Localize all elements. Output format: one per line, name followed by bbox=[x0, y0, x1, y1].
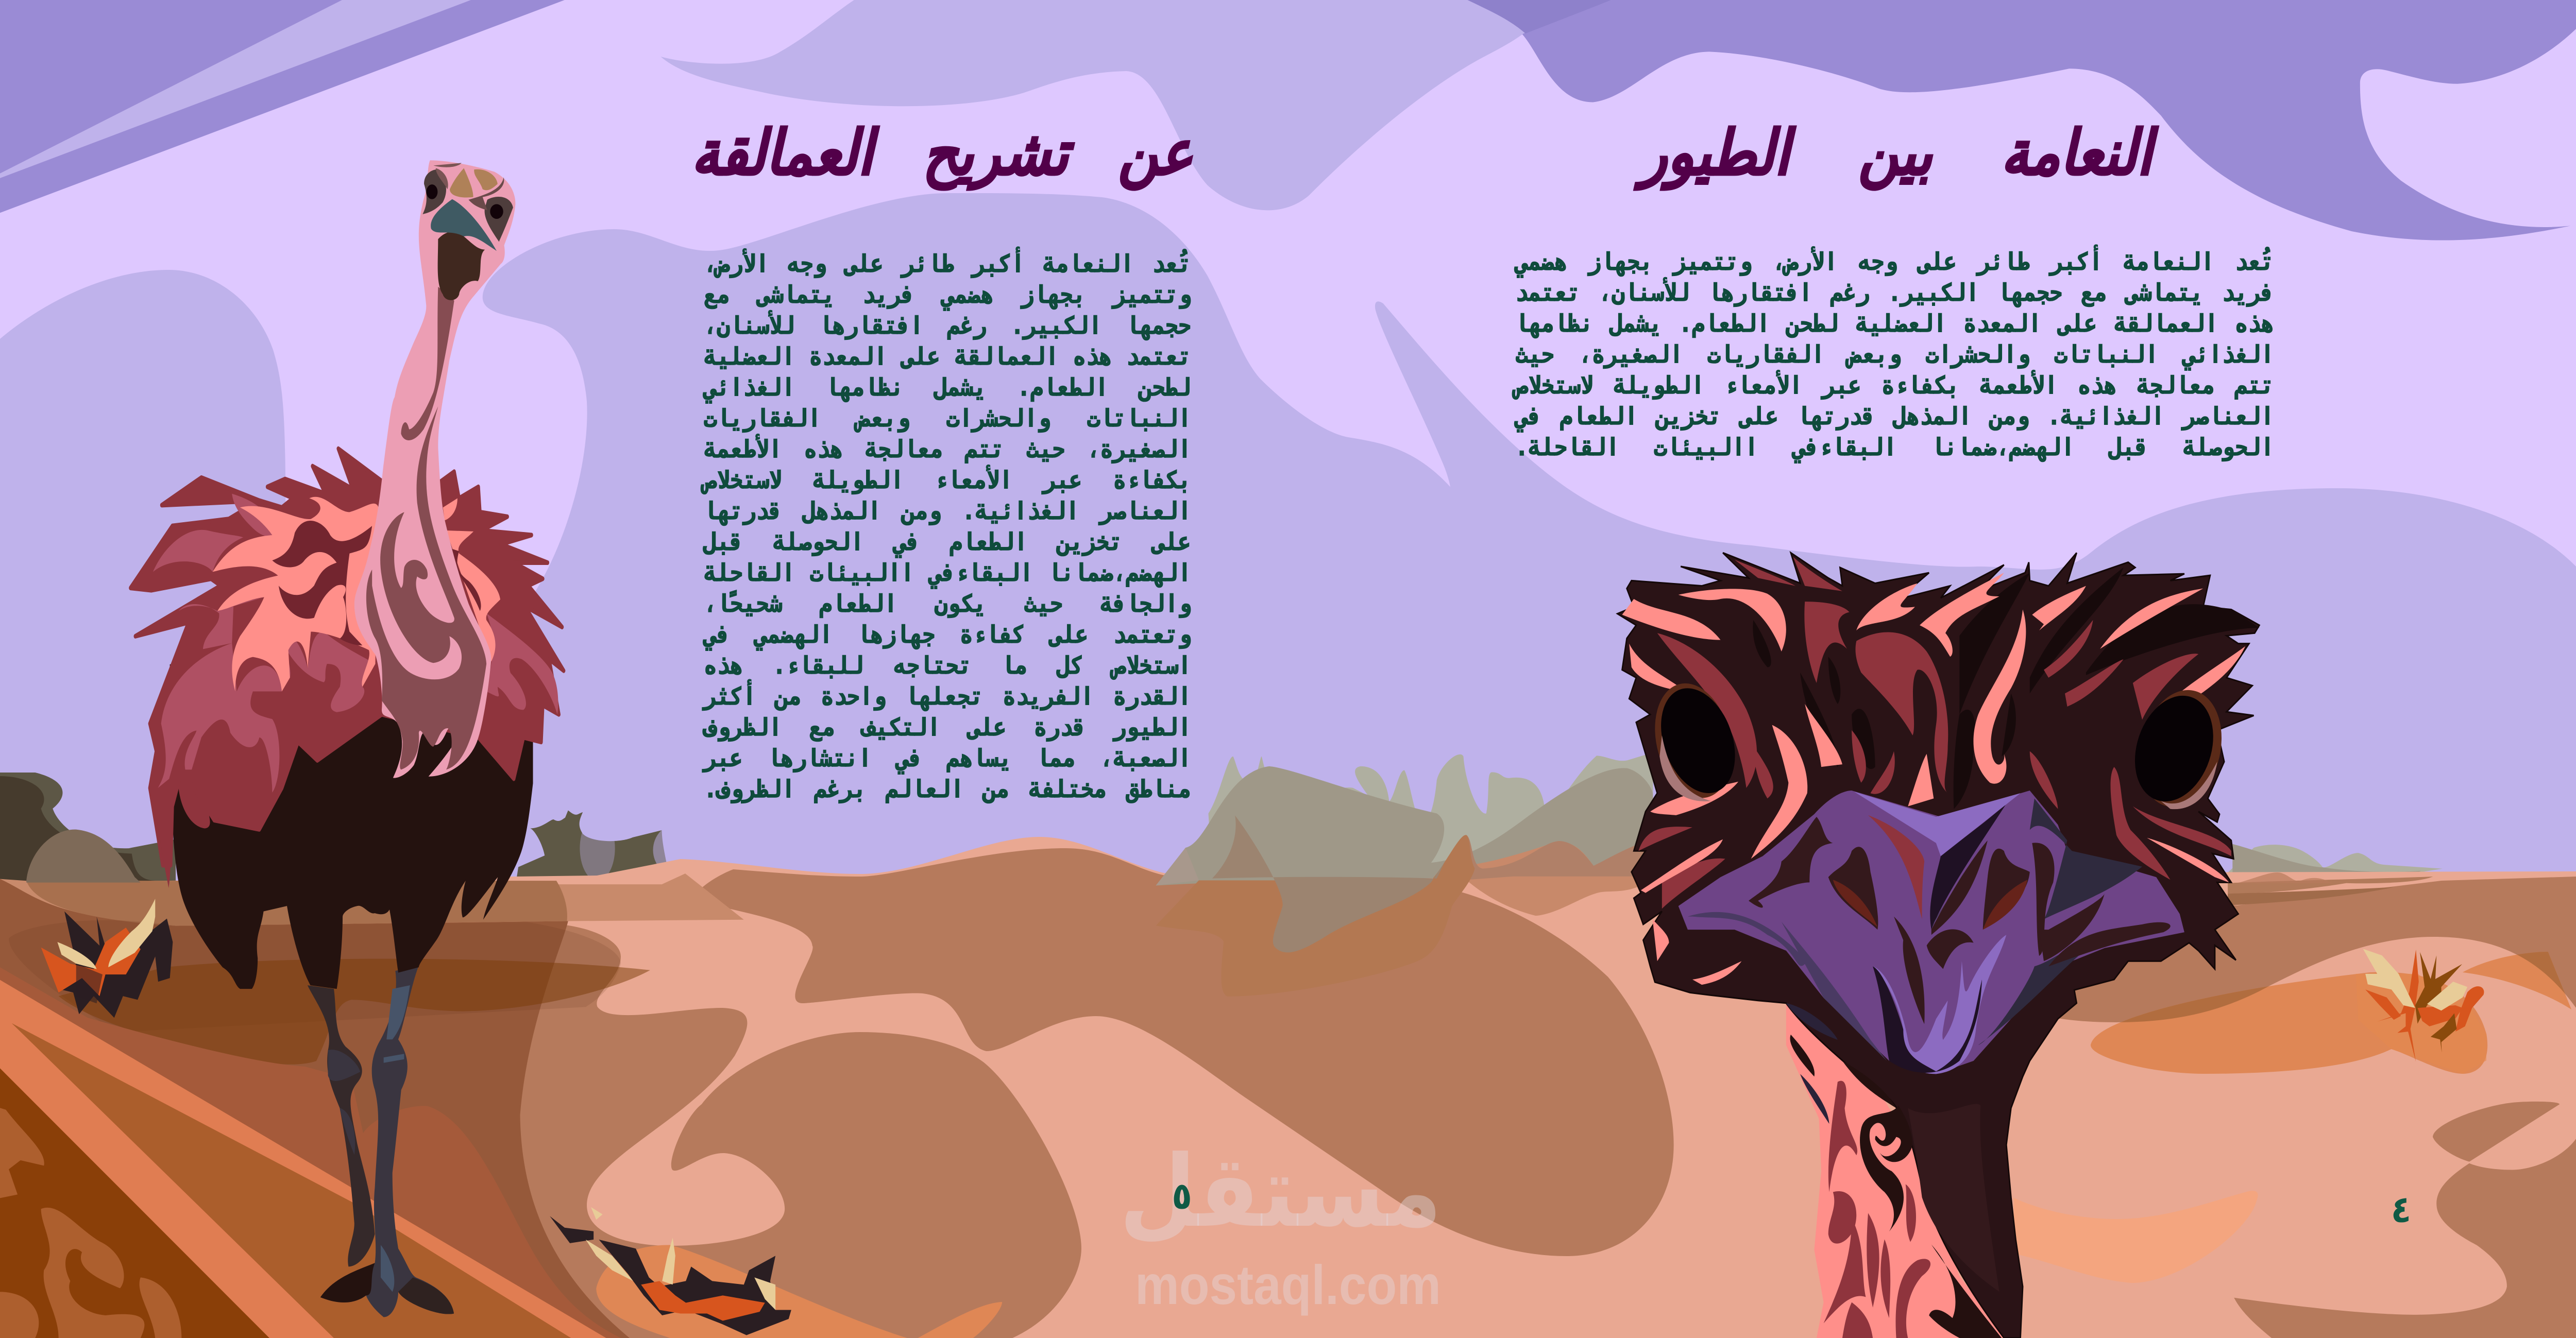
watermark: mostaql logo: مستقل bbox=[1120, 1135, 1442, 1249]
dune: right dune bbox=[1974, 877, 2576, 1022]
ostrich neck bbox=[354, 160, 515, 778]
sky: lower lavender layer bbox=[0, 193, 2576, 927]
emu right eye bbox=[2120, 678, 2234, 819]
peach and lower right dunes bbox=[2013, 1102, 2576, 1338]
ostrich head bbox=[422, 163, 513, 300]
emu neck pink bbox=[1786, 1003, 2006, 1338]
text block: left page: بكفاءة عبر الأمعاء الطويلة لاستخلاص bbox=[704, 466, 1191, 494]
left shrubs on horizon bbox=[0, 773, 706, 895]
text block: right page: تُعد النعامة أكبر طائر على وجه الأرض، وتتميز بجهاز هضمي bbox=[1515, 248, 2274, 276]
dune: right horizon shading bbox=[2228, 872, 2433, 905]
dune: orange patches bbox=[2091, 952, 2571, 1074]
text block: left page: على تخزين الطعام في الحوصلة قبل bbox=[704, 528, 1191, 556]
distant mountains: centre bbox=[1208, 752, 1653, 877]
text block: left page: النباتات والحشرات وبعض الفقاريات bbox=[704, 404, 1191, 433]
text block: right page: هذه العمالقة على المعدة العضلية لطحن الطعام. يشمل نظامها bbox=[1515, 310, 2274, 338]
emu feathers black streaks bbox=[1753, 568, 2259, 809]
ostrich dark body bbox=[151, 664, 533, 989]
text block: left page: العناصر الغذائية. ومن المذهل قدرتها bbox=[704, 497, 1191, 525]
text block: left page: الصغيرة، حيث تتم معالجة هذه الأطعمة bbox=[704, 435, 1191, 464]
dune: winding left dune bbox=[0, 924, 1081, 1338]
emu neck pattern red bbox=[1824, 1081, 1930, 1338]
left ground layers bbox=[0, 830, 650, 1338]
text block: left page: تُعد النعامة أكبر طائر على وجه الأرض، bbox=[704, 250, 1191, 278]
text block: right page: تتم معالجة هذه الأطعمة بكفاءة عبر الأمعاء الطويلة لاستخلاص bbox=[1515, 371, 2274, 400]
text block: left page: الصعبة، مما يساهم في انتشارها عبر bbox=[704, 744, 1191, 773]
text block: right page: الحوصلة قبل الهضم،ضمانا البقاءفي االبيئات القاحلة. bbox=[1515, 433, 2274, 461]
ground: brown squiggle pattern bbox=[0, 1108, 181, 1338]
emu big head portrait bbox=[1617, 553, 2259, 1338]
text block: left page: القدرة الفريدة تجعلها واحدة من أكثر bbox=[704, 682, 1191, 711]
sky: top-left stripes bbox=[0, 0, 565, 213]
page number: left: ٥ bbox=[1172, 1174, 1192, 1217]
text block: left page: استخلاص كل ما تحتاجه للبقاء. هذه bbox=[704, 651, 1191, 680]
ostrich legs bbox=[308, 966, 454, 1317]
sky: cloud overlap bbox=[1467, 0, 1612, 33]
page number: right: ٤ bbox=[2391, 1188, 2411, 1231]
ground: orange bands bbox=[0, 980, 606, 1338]
emu head silhouette bbox=[1617, 553, 2259, 1338]
text block: left page: تعتمد هذه العمالقة على المعدة العضلية bbox=[704, 342, 1191, 371]
bush: right bbox=[2356, 949, 2486, 1074]
text block: right page: فريد يتماشى مع حجمها الكبير. رغم افتقارها للأسنان، تعتمد bbox=[1515, 279, 2274, 307]
text block: left page: والجافة حيث يكون الطعام شحيحًا، bbox=[704, 590, 1191, 618]
emu neck pattern dark bbox=[1786, 1003, 2002, 1338]
text block: left page: وتتميز بجهاز هضمي فريد يتماشى مع bbox=[704, 281, 1191, 309]
heading: left page: عن تشريح العمالقة bbox=[691, 117, 1193, 189]
dune: tan shelf bbox=[0, 873, 744, 926]
text block: right page bbox=[1512, 244, 2274, 464]
sand ground bbox=[0, 837, 2576, 1338]
text block: left page: مناطق مختلفة من العالم برغم الظروف. bbox=[704, 775, 1191, 803]
watermark: mostaql logo: mostaql.com bbox=[1135, 1254, 1441, 1316]
text block: left page: الهضم،ضمانا البقاءفي االبيئات القاحلة bbox=[704, 559, 1191, 587]
text block: left page bbox=[701, 246, 1191, 803]
heading: right page: النعامة بين الطيور bbox=[1640, 117, 2152, 189]
bush: bottom bbox=[550, 1207, 791, 1335]
emu neck shading bbox=[1908, 1104, 1999, 1292]
text block: left page: الطيور قدرة على التكيف مع الظروف bbox=[704, 713, 1191, 742]
emu feathers red bbox=[1638, 557, 2231, 908]
ostrich full body bbox=[130, 160, 564, 1317]
text block: left page: وتعتمد على كفاءة جهازها الهضمي في bbox=[704, 621, 1191, 649]
ostrich wing feathers bbox=[130, 449, 564, 865]
ground: orange patch below bush bbox=[596, 1245, 1002, 1338]
dune: orange overlap bbox=[2121, 952, 2565, 1022]
text block: right page: الغذائي النباتات والحشرات وبعض الفقاريات الصغيرة، حيث bbox=[1515, 340, 2274, 369]
sky: top-centre lavender cloud bbox=[661, 0, 1612, 210]
emu left eye bbox=[1642, 672, 1750, 809]
emu feathers salmon bbox=[1622, 573, 2245, 985]
dune: main centre bbox=[695, 848, 1674, 1256]
text block: left page: حجمها الكبير. رغم افتقارها للأسنان، bbox=[704, 312, 1191, 340]
text block: right page: العناصر الغذائية. ومن المذهل قدرتها على تخزين الطعام في bbox=[1515, 402, 2274, 431]
watermark: mostaql logo bbox=[1120, 1135, 1442, 1316]
bush: left bbox=[41, 899, 173, 1018]
centre horizon: translucent hills bbox=[1156, 766, 1653, 997]
text block: left page: لطحن الطعام. يشمل نظامها الغذائي bbox=[704, 373, 1191, 402]
emu beak bbox=[1679, 791, 2184, 1074]
distant mountains: right bbox=[2228, 844, 2443, 883]
sky: top-right dark cloud bbox=[1467, 0, 2576, 241]
